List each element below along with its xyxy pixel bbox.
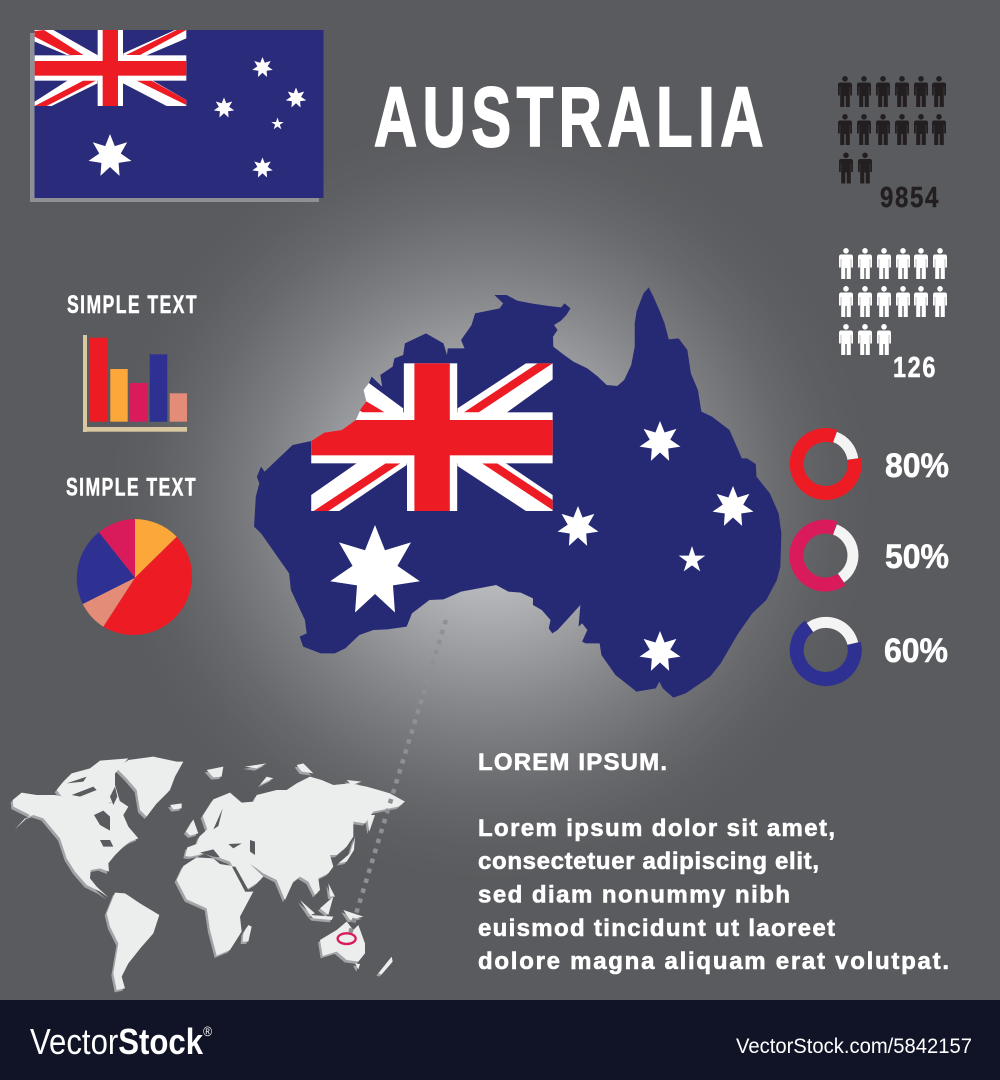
label 50%: 50% <box>885 538 949 576</box>
map land <box>13 757 405 990</box>
footer logo: ® <box>203 1023 213 1039</box>
flag shadow <box>30 33 319 202</box>
map shadow <box>11 759 403 992</box>
flag stars <box>89 57 306 177</box>
Australia silhouette <box>254 287 781 698</box>
flag field <box>34 30 324 198</box>
flag canton: union jack <box>35 30 186 106</box>
text heading: LOREM IPSUM. <box>478 749 667 776</box>
body text: consectetuer adipiscing elit, <box>478 848 819 875</box>
location marker <box>338 933 356 944</box>
title: AUSTRALIA <box>374 70 769 164</box>
label 60%: 60% <box>884 632 948 670</box>
people pictogram: dark <box>838 76 946 184</box>
number 9854: 9854 <box>880 182 940 214</box>
dotted leader line <box>349 620 446 937</box>
world map <box>11 757 405 992</box>
bar chart <box>83 335 187 432</box>
people pictogram: white <box>839 248 947 355</box>
footer bar <box>0 1000 1000 1080</box>
inland seas <box>67 777 255 892</box>
pie chart <box>77 519 192 635</box>
donut 80% <box>797 435 855 493</box>
body text: euismod tincidunt ut laoreet <box>478 915 835 942</box>
map of Australia with flag <box>254 287 781 698</box>
body text: sed diam nonummy nibh <box>478 882 790 908</box>
heading: pie chart: SIMPLE TEXT <box>66 474 197 502</box>
footer logo: VectorStock <box>30 1021 216 1062</box>
donut 50% <box>796 527 853 585</box>
number 126: 126 <box>893 352 937 384</box>
flag panel <box>30 30 324 202</box>
footer url: VectorStock.com/5842157 <box>736 1035 972 1058</box>
body text <box>478 815 949 975</box>
body text: dolore magna aliquam erat volutpat. <box>478 948 949 975</box>
body text: Lorem ipsum dolor sit amet, <box>478 815 835 842</box>
donut 60% <box>797 622 855 679</box>
union jack clipped to coast <box>311 358 553 511</box>
label 80%: 80% <box>885 447 949 485</box>
map stars <box>330 421 753 671</box>
heading: bar chart: SIMPLE TEXT <box>67 291 198 319</box>
